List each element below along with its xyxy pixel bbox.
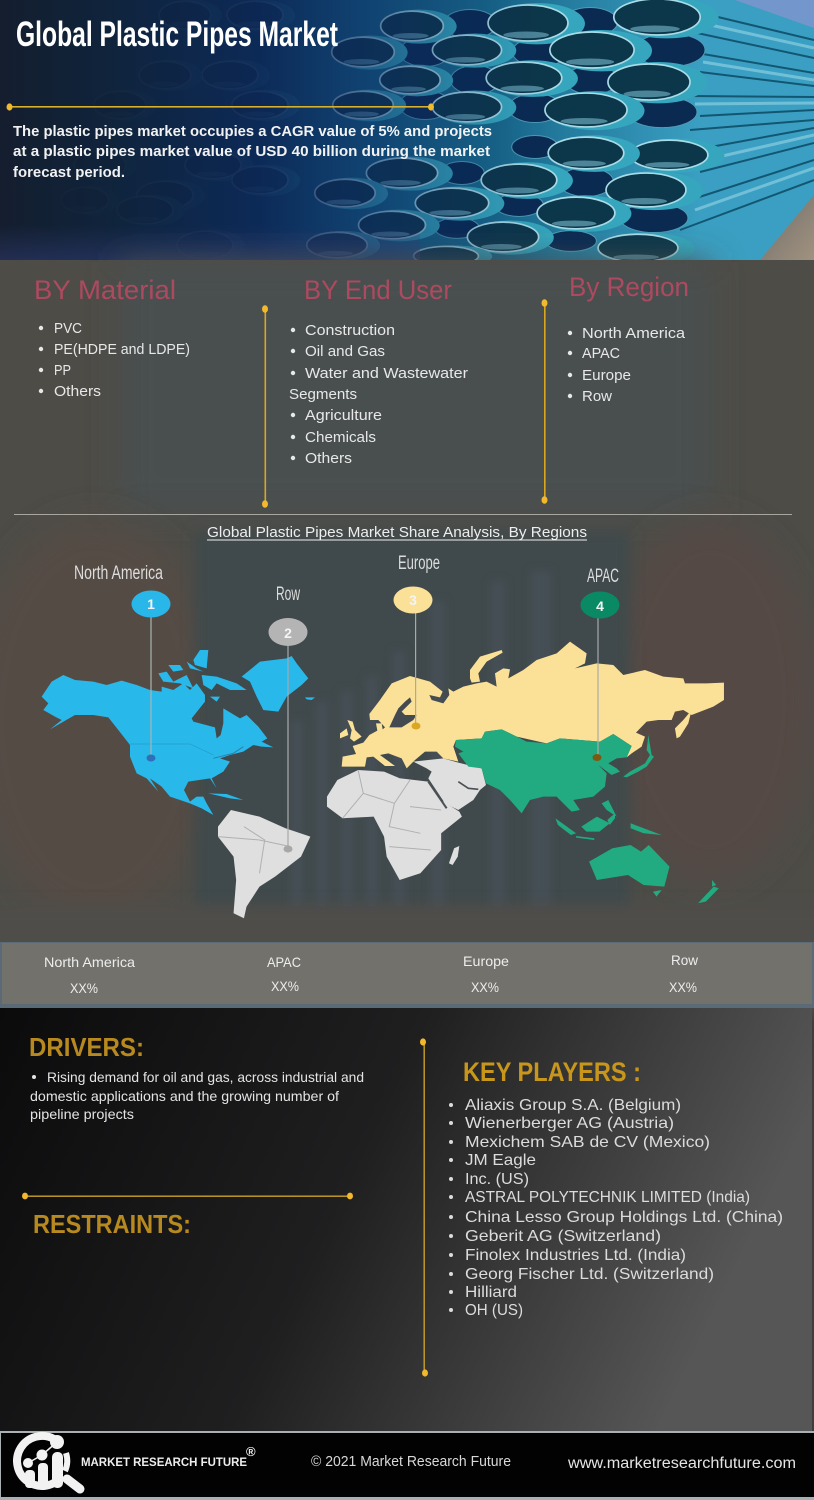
list: end users: Water and Wastewater [305, 365, 468, 382]
list: materials: Others [54, 383, 101, 400]
share table strip: XX% [669, 979, 697, 995]
heading: restraints: RESTRAINTS: [33, 1209, 191, 1239]
text: copyright: © 2021 Market Research Future [311, 1454, 511, 1470]
text: drivers body: pipeline projects [30, 1106, 134, 1122]
list: key players: Finolex Industries Ltd. (India) [465, 1247, 686, 1264]
list: key players: OH (US) [465, 1302, 523, 1319]
heading: by region: By Region [569, 272, 689, 302]
panel: by end user [289, 275, 468, 467]
map: europe and russia [340, 642, 724, 768]
gold divider under title [6, 103, 434, 111]
callout: north america pin: North America [74, 563, 163, 584]
intro text: The plastic pipes market occupies a CAGR value of 5% and projects [13, 124, 492, 140]
heading: drivers: DRIVERS: [29, 1032, 144, 1062]
list: key players: Mexichem SAB de CV (Mexico) [465, 1134, 710, 1151]
divider: material / end user [262, 305, 268, 508]
pipe ends without collar [562, 7, 618, 37]
list: key players: JM Eagle [465, 1152, 536, 1169]
divider: drivers / restraints [22, 1193, 353, 1199]
faded pipes at left [61, 0, 300, 261]
background: blurred hands and chart panel [0, 260, 814, 1015]
callout: apac pin: APAC [587, 566, 619, 587]
footer bar [0, 1431, 814, 1500]
list: end users [289, 322, 468, 467]
share table strip [0, 942, 814, 1008]
panel: by material [34, 275, 190, 400]
list: key players: Geberit AG (Switzerland) [465, 1228, 661, 1245]
list: materials: PE(HDPE and LDPE) [54, 341, 190, 358]
callout: row pin [268, 584, 308, 852]
list: materials: PP [54, 362, 71, 379]
heading: by end user: BY End User [304, 275, 452, 305]
intro text [13, 124, 492, 181]
share table strip: XX% [471, 979, 499, 995]
chart heading: Global Plastic Pipes Market Share Analysis, By Regions [207, 524, 587, 541]
pipe ends with collar [614, 0, 719, 38]
icon: registered mark: ® [246, 1444, 256, 1459]
panel: drivers [29, 1032, 364, 1122]
map: asia pacific [455, 729, 719, 903]
callout: apac pin: 4 [596, 598, 604, 614]
list: regions: APAC [582, 345, 620, 362]
text: website: www.marketresearchfuture.com [567, 1455, 796, 1472]
share table strip: Europe [463, 953, 509, 969]
text: drivers body: domestic applications and the growing number of [30, 1088, 339, 1104]
list: end users: Others [305, 450, 352, 467]
panel: by region [568, 272, 689, 405]
share table strip: Row [671, 952, 699, 968]
heading: key players: KEY PLAYERS : [463, 1057, 641, 1087]
list: key players: Wienerberger AG (Austria) [465, 1115, 674, 1132]
callout: north america pin [74, 563, 170, 762]
divider: vertical gold line [420, 1038, 428, 1377]
list: key players: Inc. (US) [465, 1171, 529, 1188]
list: materials [39, 320, 190, 400]
list: end users: Segments [289, 386, 357, 403]
share table strip: XX% [70, 980, 98, 996]
world map [42, 642, 724, 918]
heading: by material: BY Material [34, 275, 176, 305]
list: materials: PVC [54, 320, 82, 337]
callout: row pin: 2 [284, 625, 292, 641]
share table strip: APAC [267, 954, 301, 970]
list: key players: China Lesso Group Holdings Ltd. (China) [465, 1209, 783, 1226]
list: regions [568, 325, 686, 405]
map: rest of world [218, 758, 486, 918]
text: drivers body [30, 1069, 364, 1122]
list: regions: Row [582, 388, 612, 405]
callout: row pin: Row [276, 584, 300, 605]
panel: key players [449, 1057, 783, 1319]
list: end users: Oil and Gas [305, 343, 385, 360]
hero banner: stacked blue pipes photo [0, 0, 814, 267]
intro text: forecast period. [13, 165, 125, 181]
list: key players [449, 1097, 783, 1319]
list: end users: Agriculture [305, 407, 382, 424]
list: key players: Aliaxis Group S.A. (Belgium) [465, 1097, 681, 1114]
list: key players: Georg Fischer Ltd. (Switzerland) [465, 1266, 714, 1283]
list: end users: Chemicals [305, 429, 376, 446]
share table strip: XX% [271, 978, 299, 994]
share table strip: North America [44, 954, 135, 970]
map: north america [42, 650, 315, 815]
list: end users: Construction [305, 322, 395, 339]
text: drivers body: Rising demand for oil and gas, across industrial and [47, 1069, 364, 1085]
icon: market research future logo [17, 1435, 80, 1489]
list: key players: Hilliard [465, 1284, 517, 1301]
text: brand name: MARKET RESEARCH FUTURE [81, 1457, 247, 1469]
list: regions: North America [582, 325, 686, 342]
callout: europe pin: Europe [398, 553, 440, 574]
callout: north america pin: 1 [147, 596, 155, 612]
list: regions: Europe [582, 367, 631, 384]
divider: end user / region [542, 299, 548, 504]
callout: europe pin [394, 553, 440, 730]
callout: europe pin: 3 [409, 592, 417, 608]
lower dark panel background [0, 1008, 812, 1431]
main title: Global Plastic Pipes Market [16, 15, 338, 54]
list: key players: ASTRAL POLYTECHNIK LIMITED (India) [465, 1189, 750, 1206]
callout: apac pin [580, 566, 620, 761]
intro text: at a plastic pipes market value of USD 40 billion during the market [13, 144, 490, 160]
